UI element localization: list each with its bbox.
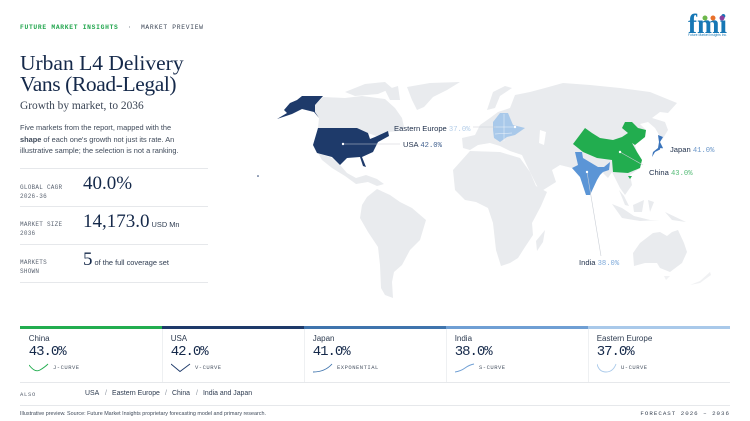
also row: Eastern Europe [112, 390, 160, 397]
curve icon: V-curve [171, 364, 190, 372]
card: Japan: EXPONENTIAL [337, 364, 379, 371]
India [572, 152, 610, 195]
stat: markets shown: MARKETS [20, 259, 47, 266]
card: India: S-CURVE [479, 364, 506, 371]
Eastern Europe [493, 113, 525, 142]
also row: India and Japan [203, 390, 252, 397]
markers [342, 126, 662, 173]
also row: China [172, 390, 190, 397]
subtitle: Growth by market, to 2036 [20, 100, 144, 112]
stat: markets shown: 5 of the full coverage set [83, 249, 169, 270]
also row: USA [85, 390, 99, 397]
card: Japan: Japan [313, 334, 334, 343]
source note: Illustrative preview. Source: Future Market Insights proprietary forecasting model and primary research. [20, 411, 266, 417]
also row [20, 390, 252, 398]
logo: fmi: fmi [688, 9, 727, 39]
curve icon: J-curve [29, 364, 48, 372]
label: Eastern Europe: Eastern Europe 37.0% [394, 124, 470, 134]
card: Eastern Europe: U-CURVE [621, 364, 648, 371]
title: Vans (Road-Legal) [20, 72, 176, 96]
card: USA: USA [171, 334, 187, 343]
title: Urban L4 Delivery [20, 50, 184, 74]
curve icon: S-curve [455, 364, 474, 372]
stray dot [257, 175, 259, 177]
also row: ALSO [20, 391, 36, 398]
label: Japan: Japan 41.0% [670, 145, 714, 155]
card: USA: V-CURVE [195, 364, 222, 371]
forecast range: FORECAST 2026 – 2036 [640, 410, 730, 417]
stat: global CAGR: 2026-36 [20, 192, 47, 200]
card: China: J-CURVE [53, 364, 80, 371]
stat: markets shown [20, 249, 169, 274]
curve icon: exponential [313, 364, 332, 372]
label: USA: USA 42.0% [403, 140, 442, 150]
stat: market size [20, 211, 179, 236]
also row: / [105, 390, 107, 397]
card: Eastern Europe [588, 326, 730, 382]
card: China: China [29, 334, 50, 343]
label: China: China 43.0% [649, 168, 693, 178]
land masses [315, 82, 711, 298]
card: Japan: 41.0% [313, 344, 350, 360]
curve icon: U-curve [597, 364, 616, 372]
card: USA [162, 326, 304, 382]
header eyebrow: FUTURE MARKET INSIGHTS · MARKET PREVIEW [20, 24, 204, 31]
card: Eastern Europe: 37.0% [597, 344, 634, 360]
stat: market size: MARKET SIZE [20, 221, 62, 228]
card: China [20, 326, 162, 372]
also row: / [165, 390, 167, 397]
intro text: illustrative sample; the selection is not a ranking. [20, 146, 179, 155]
intro text: shape of each one's growth not just its rate. An [20, 134, 174, 144]
stat: global CAGR [20, 173, 132, 200]
title [20, 50, 184, 96]
stat: global CAGR: GLOBAL CAGR [20, 184, 62, 191]
card: India: 38.0% [455, 344, 492, 360]
card: China: 43.0% [29, 344, 66, 360]
card: Japan [304, 326, 446, 382]
card: India: India [455, 334, 472, 343]
leader lines [343, 127, 643, 256]
logo: fmi: Future Market Insights Inc. [688, 33, 727, 37]
card: Eastern Europe: Eastern Europe [597, 334, 652, 343]
Japan [652, 135, 663, 157]
stat: market size: 2036 [20, 230, 35, 236]
card: India [446, 326, 588, 382]
stat: global CAGR: 40.0% [83, 173, 132, 194]
China [573, 122, 646, 173]
label: India: India 38.0% [579, 258, 619, 268]
intro text: Five markets from the report, mapped with the [20, 123, 171, 132]
USA [277, 96, 389, 167]
stat: market size: 14,173.0 USD Mn [83, 211, 179, 232]
card: USA: 42.0% [171, 344, 208, 360]
intro text [20, 123, 179, 155]
also row: / [196, 390, 198, 397]
stat: markets shown: SHOWN [20, 268, 39, 274]
